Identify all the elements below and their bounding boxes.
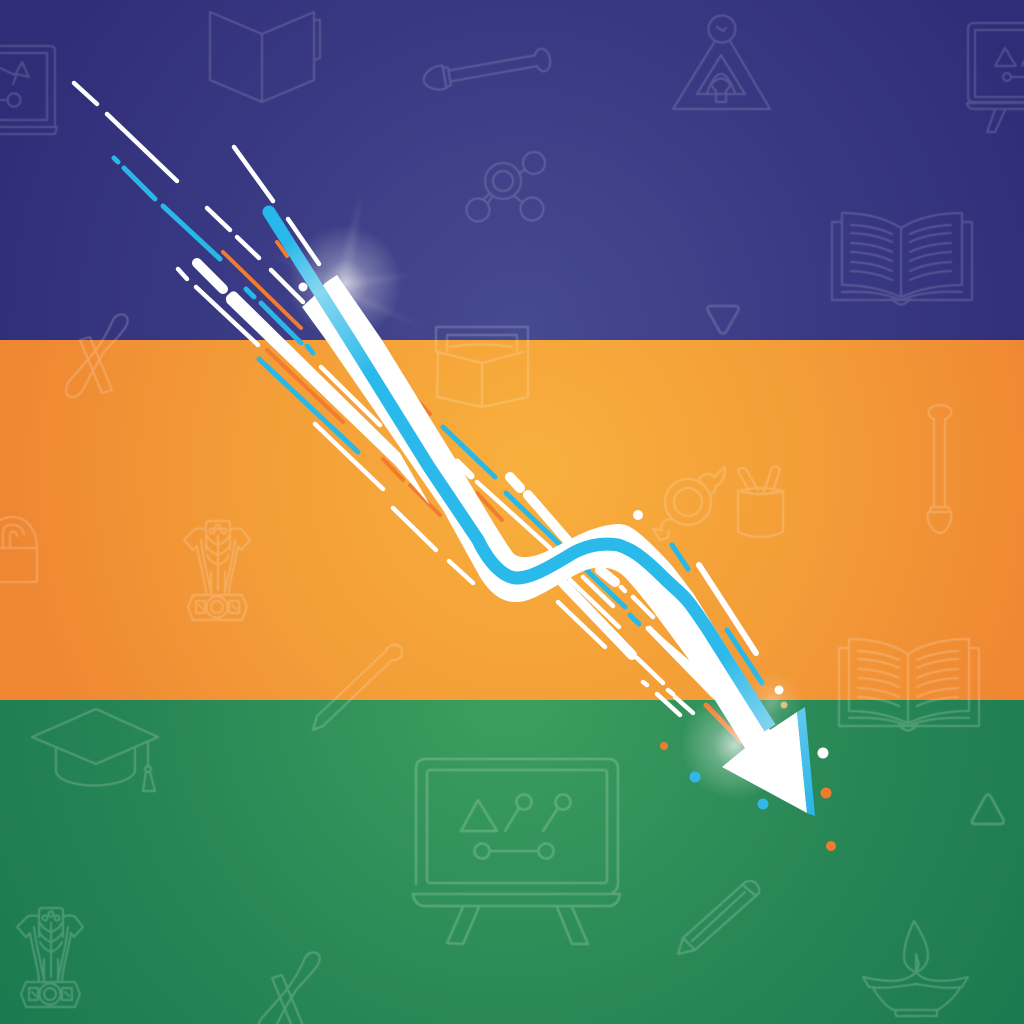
background: saffron band: [0, 340, 1024, 700]
icon: diya lamp: [863, 921, 968, 1016]
arrow: cyan centre line: [269, 212, 770, 728]
glow: arrow head: [680, 690, 790, 800]
icon: pen holder: [738, 467, 783, 537]
background: navy band: [0, 0, 1024, 340]
arrow: white ribbon and head: [302, 275, 807, 813]
icon: mallet tilted: [422, 47, 552, 92]
glow: top of arrow: [270, 190, 430, 341]
icon: open book: [832, 213, 972, 304]
icons on navy band: [0, 12, 1024, 334]
background: green band: [0, 700, 1024, 1024]
speed lines: orange: [223, 242, 742, 742]
icon: laptop left: [0, 46, 57, 134]
icon: graduation cap: [32, 709, 158, 791]
glow: arrow right: [740, 670, 804, 734]
icon: crossed tools lower: [258, 952, 320, 1024]
arrow: cyan head edge: [797, 707, 815, 816]
icon: compass ring: [653, 467, 725, 540]
speed lines: white: [74, 83, 756, 715]
main arrow: [262, 206, 815, 816]
icon: presentation board right: [967, 23, 1024, 132]
icon: national emblem lower: [17, 908, 83, 1007]
icon: padlock: [0, 517, 37, 582]
icon: open box: [436, 327, 528, 407]
confetti dots: [298, 282, 836, 851]
icon: presentation board: [413, 759, 620, 944]
icon: small triangle: [972, 794, 1004, 824]
icon: rounded triangle: [707, 306, 739, 334]
icon: closed notebook: [210, 12, 320, 102]
icon: molecule: [466, 152, 545, 222]
icon: crossed tools: [66, 314, 128, 397]
icon: standing mallet: [928, 405, 951, 533]
icon: pencil: [678, 881, 759, 954]
icons on saffron band: [0, 314, 979, 730]
icons on green band: [17, 709, 1004, 1024]
arrow: cyan round tail cap: [262, 206, 276, 218]
icon: national emblem: [184, 521, 250, 620]
speed lines: cyan: [114, 158, 762, 683]
icon: open book lower: [839, 639, 979, 730]
icon: triangle emblem: [673, 16, 770, 109]
icon: pin: [313, 645, 402, 730]
